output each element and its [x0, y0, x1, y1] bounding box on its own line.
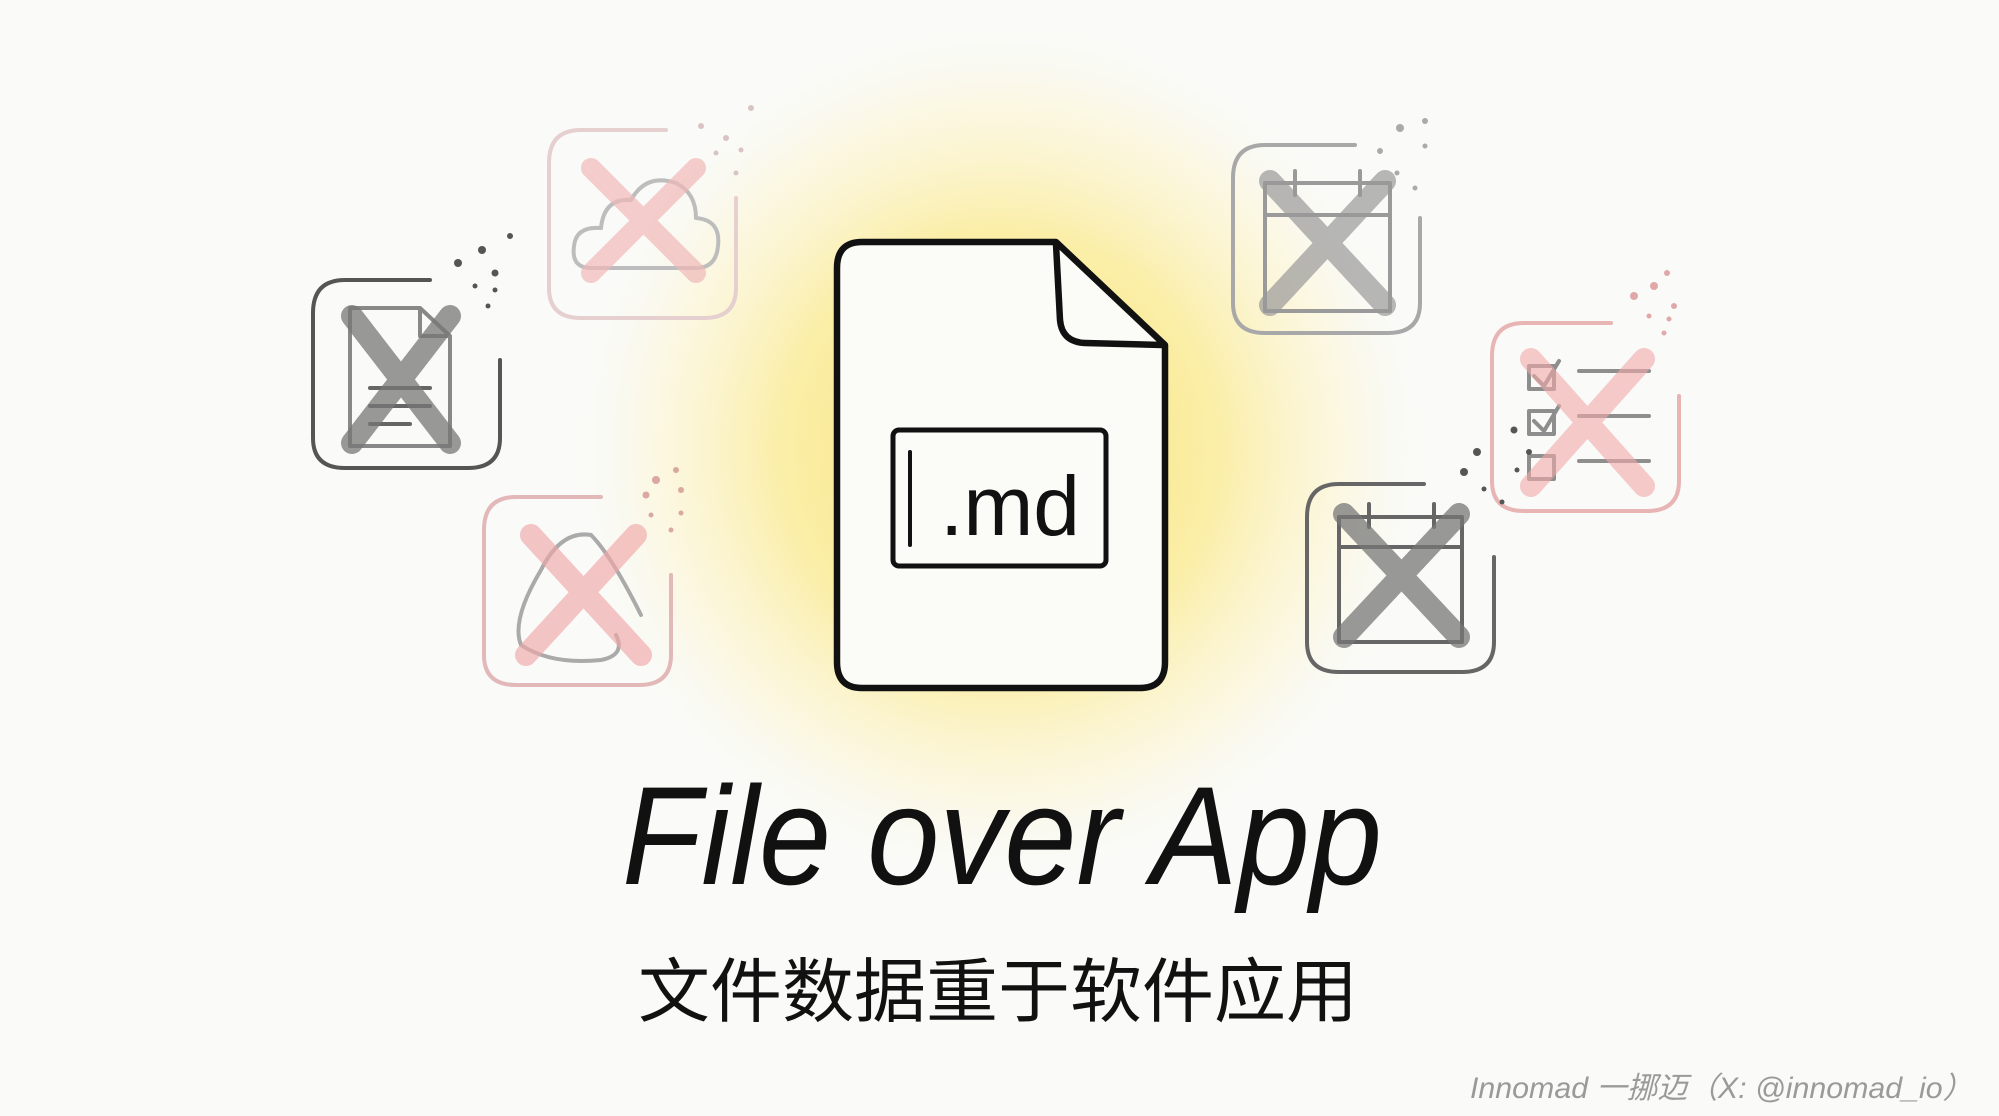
watermark: Innomad 一挪迈（X: @innomad_io）	[1470, 1072, 1973, 1105]
icon: calendar (dark gray)	[1307, 426, 1532, 672]
.md label box	[893, 430, 1106, 566]
.md label box: .md	[940, 459, 1080, 553]
subtitle (Chinese): 文件数据重于软件应用	[638, 953, 1358, 1031]
icon: document (dark gray)	[313, 233, 513, 468]
icon: cloud (pink)	[549, 105, 754, 318]
icon: drive triangle (pink)	[484, 467, 684, 685]
main document icon	[837, 242, 1165, 688]
icon: checklist (pink)	[1492, 270, 1679, 511]
title: File over App	[622, 757, 1382, 914]
glow behind document	[550, 20, 1450, 880]
icon: calendar (light gray)	[1233, 118, 1428, 333]
